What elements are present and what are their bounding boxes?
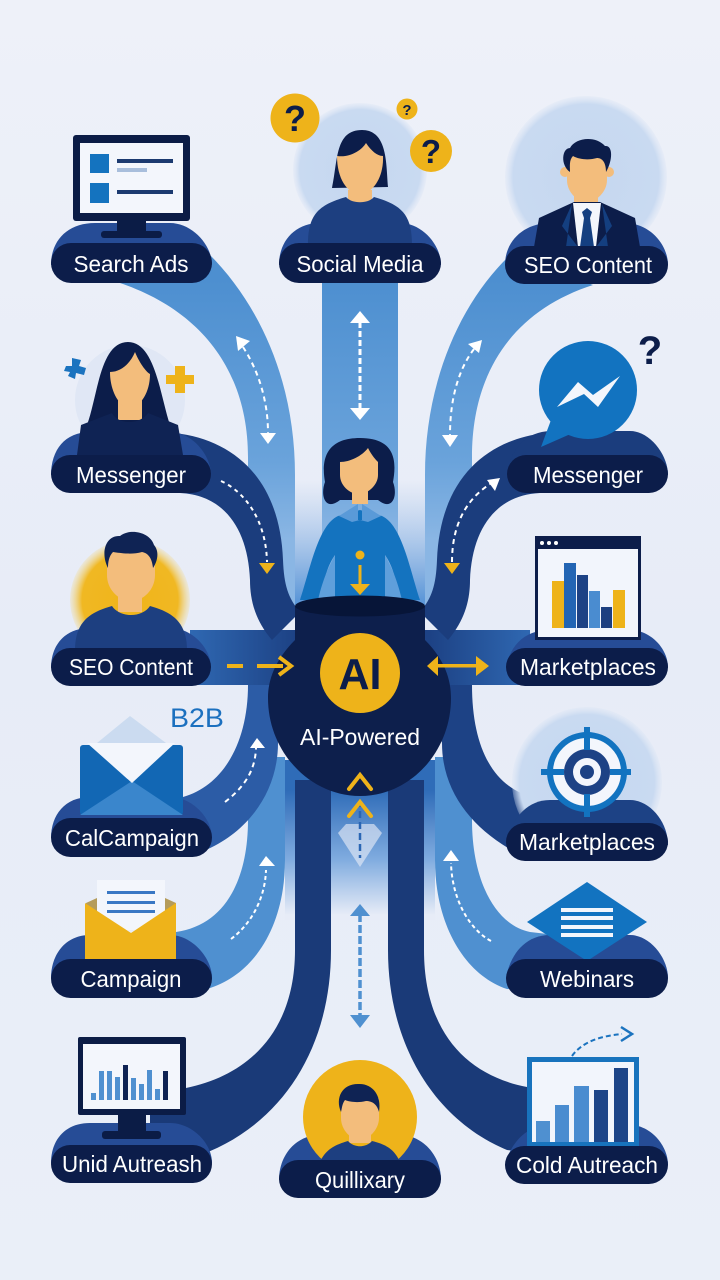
node: Messenger left [51, 342, 211, 493]
arrow: into AI [350, 550, 370, 595]
arrow: dashed blue vertical [350, 904, 370, 1028]
person: man [320, 1084, 400, 1162]
arrow: Webinars [443, 850, 491, 941]
backdrop circle [293, 103, 427, 237]
central AI pot [268, 596, 451, 796]
node: Unid Autreash: Unid Autreash [62, 1151, 202, 1177]
node: Marketplaces chart: Marketplaces [520, 654, 656, 680]
node: Webinars [506, 882, 668, 998]
node: CalCampaign: CalCampaign [65, 825, 199, 851]
arrow: Messenger right [444, 478, 500, 574]
backdrop glow [70, 540, 190, 660]
arrow: Search Ads [236, 336, 276, 444]
node: Messenger right: Messenger [533, 462, 643, 488]
icon: question badge medium: ? [421, 133, 441, 170]
chevrons under AI [349, 775, 371, 816]
icon: question badge large: ? [284, 98, 306, 139]
node: Cold Autreach [505, 1027, 668, 1184]
icon: yellow plus [166, 366, 194, 393]
node: Search Ads [51, 135, 212, 283]
backdrop circle [505, 96, 667, 258]
icon: blue plus [64, 358, 86, 379]
central figure: woman [300, 438, 420, 600]
icon: messenger bubble [539, 341, 637, 447]
node: Campaign: Campaign [80, 966, 182, 992]
node: Marketplaces target [506, 707, 668, 861]
arrow: CalCampaign [225, 738, 265, 802]
icon: browser chart [535, 536, 641, 640]
pale diamond [338, 800, 382, 867]
icon: question mark: ? [638, 329, 662, 373]
node: Social Media: Social Media [296, 251, 424, 277]
node: Campaign [51, 880, 212, 998]
icon: monitor [73, 135, 190, 238]
person: man [75, 532, 187, 650]
arrow: Campaign [231, 856, 275, 939]
node: SEO Content left [51, 532, 211, 686]
arrow: double to Marketplaces [427, 656, 489, 676]
node: Marketplaces target: Marketplaces [519, 829, 655, 855]
arrow: growth [572, 1027, 632, 1056]
icon: yellow envelope [85, 880, 176, 959]
icon: target [541, 727, 631, 817]
icon: question badge large [270, 94, 320, 142]
node: SEO Content top [505, 96, 668, 284]
node: Cold Autreach: Cold Autreach [516, 1152, 658, 1178]
icon: growth chart [530, 1060, 636, 1144]
arrow: SEO Content [442, 340, 482, 447]
icon: question badge small [396, 98, 418, 120]
flow ribbons [120, 250, 600, 1165]
arrow: Social Media [350, 311, 370, 420]
node: Social Media [279, 103, 441, 283]
node: Search Ads: Search Ads [74, 251, 188, 277]
label: AI-Powered: AI-Powered [300, 724, 420, 750]
node: Marketplaces chart [506, 536, 668, 686]
node: Unid Autreash [51, 1037, 212, 1183]
person: long-haired woman [77, 342, 183, 455]
node: Messenger right [507, 341, 668, 493]
icon: blue envelope [80, 716, 183, 815]
person: woman [308, 130, 412, 245]
icon: diamond list [527, 882, 647, 961]
node: Messenger left: Messenger [76, 462, 186, 488]
node: CalCampaign [51, 716, 212, 857]
node: Quillixary [279, 1060, 441, 1198]
node: SEO Content left: SEO Content [69, 654, 194, 680]
icon: question badge medium [410, 130, 452, 172]
node: SEO Content top: SEO Content [524, 252, 653, 278]
label: B2B: B2B [170, 703, 224, 733]
node: Quillixary: Quillixary [315, 1167, 405, 1193]
arrow: Messenger left [221, 481, 275, 574]
icon: monitor with bars [78, 1037, 186, 1139]
AI badge [320, 633, 400, 713]
icon: question badge small: ? [402, 102, 412, 119]
AI badge: AI [338, 650, 382, 699]
node: Webinars: Webinars [540, 966, 634, 992]
person: man in suit [534, 139, 640, 247]
arrow: left into AI [227, 657, 291, 675]
